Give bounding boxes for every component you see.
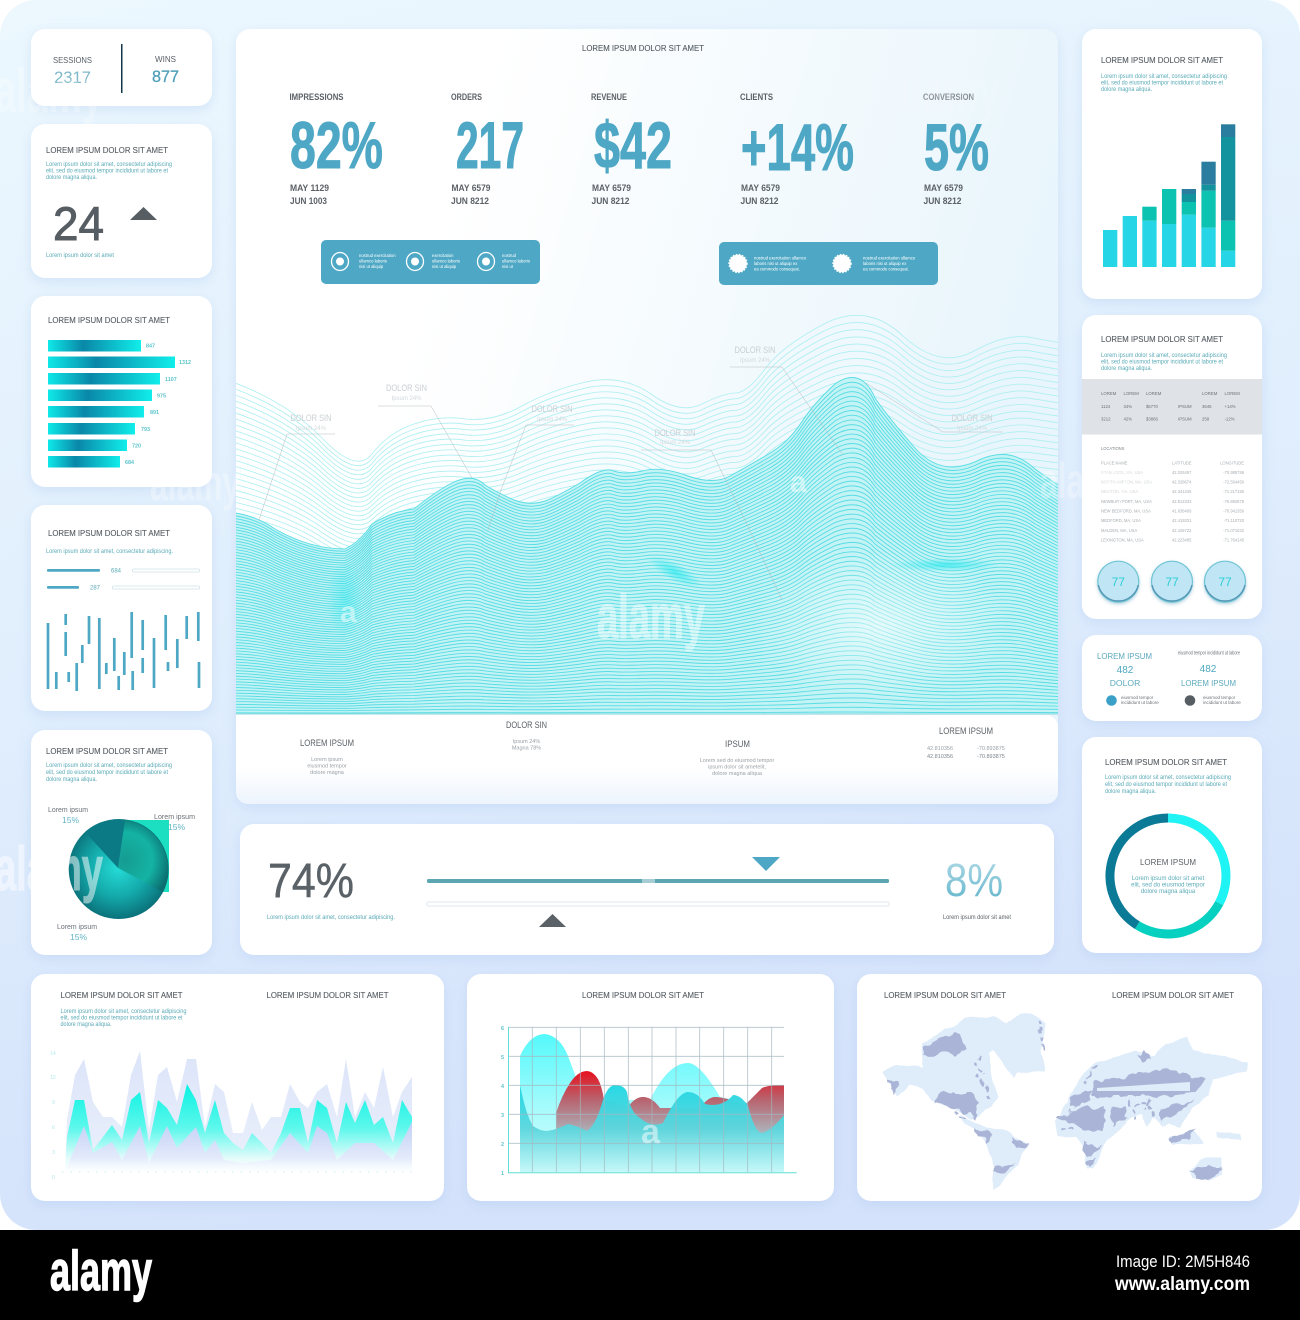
KPI: orders: ORDERS: [451, 92, 482, 102]
KPI: impressions: [290, 92, 383, 206]
score circles: [1098, 561, 1246, 602]
KPI: impressions: MAY 1129: [290, 183, 329, 193]
card: spiky area chart: 3: [52, 1150, 55, 1156]
KPI: conversion: [923, 92, 989, 206]
locations table: LONGITUDE: [1220, 460, 1244, 466]
locations table: 42.328674: [1172, 480, 1192, 484]
locations table: NEWTON, MA, USA: [1101, 489, 1138, 494]
card: sessions and wins: WINS: [155, 55, 176, 64]
locations table: -72.564450: [1223, 480, 1245, 484]
KPI: orders: 217: [456, 108, 524, 182]
score circles: 77: [1218, 575, 1232, 589]
card: 74% slider: Lorem ipsum dolor sit amet, consectetur adipiscing.: [267, 915, 395, 921]
KPI: clients: [740, 92, 854, 206]
card: small stats: incididunt ut labore: [1203, 700, 1241, 705]
callout labels: Ipsum 24%: [296, 426, 327, 432]
gray summary band: 3646: [1202, 404, 1212, 409]
card: horizontal bars: 847: [146, 344, 155, 350]
card: data table: dolore magna aliqua.: [1101, 366, 1152, 372]
legend pill left: ullamco laboris: [432, 258, 460, 264]
main panel footer: LOREM IPSUM: [300, 738, 354, 748]
locations table: 42.026497: [1172, 470, 1192, 475]
card: spiky area chart: LOREM IPSUM DOLOR SIT AMET: [60, 990, 183, 1000]
card: horizontal bars: 793: [141, 427, 150, 433]
card: stacked bar chart: elit, sed do eiusmod tempor incididunt ut labore et: [1101, 80, 1223, 86]
card: sessions and wins: 877: [152, 67, 179, 86]
callout labels: Ipsum 24%: [660, 440, 691, 446]
callout labels: DOLOR SIN: [386, 383, 427, 393]
locations table: PLACE NAME: [1101, 460, 1128, 466]
card: spiky area chart: 6: [52, 1125, 55, 1131]
gray summary band: LOREM: [1146, 391, 1162, 396]
card: pie chart: 15%: [70, 932, 87, 942]
locations table: [1101, 446, 1245, 542]
KPI: revenue: MAY 6579: [592, 183, 631, 193]
locations table: LEXINGTON, MA, USA: [1101, 538, 1144, 542]
card: data table: Lorem ipsum dolor sit amet, consectetur adipiscing: [1101, 353, 1227, 359]
main panel footer: [236, 715, 1058, 804]
card: horizontal bars: 891: [150, 410, 159, 416]
card: world map: LOREM IPSUM DOLOR SIT AMET: [884, 990, 1007, 1000]
main panel footer: eiusmod tempor: [307, 764, 347, 770]
wave terrain chart: [235, 315, 1062, 714]
locations table: MEDFORD, MA, USA: [1101, 518, 1141, 523]
watermarks: alamy: [890, 57, 1000, 126]
watermarks: a: [340, 596, 357, 629]
gray summary band: 258: [1202, 416, 1210, 422]
legend pill left: nisi ut: [502, 264, 514, 269]
watermarks: a: [641, 1113, 661, 1151]
locations table: NEW BEDFORD, MA, USA: [1101, 508, 1151, 514]
locations table: 42.425722: [1172, 528, 1192, 533]
watermarks: alamy: [150, 455, 240, 511]
card: small stats: incididunt ut labore: [1121, 700, 1159, 705]
watermarks: alamy: [597, 583, 705, 652]
card: small stats: LOREM IPSUM: [1097, 651, 1152, 661]
card: world map: [857, 974, 1262, 1201]
card: spiky area chart: elit, sed do eiusmod tempor incididunt ut labore et: [60, 1016, 183, 1022]
legend pill left: nisi ut aliquip: [432, 264, 457, 269]
card: layered area chart: 2: [501, 1142, 504, 1148]
main panel footer: 42.810356: [927, 746, 953, 752]
card: 24 stat: dolore magna aliqua.: [46, 175, 97, 181]
card: 74% slider: Lorem ipsum dolor sit amet: [943, 915, 1011, 921]
card: layered area chart: 1: [501, 1171, 504, 1177]
card: 24 stat: 24: [53, 197, 104, 250]
card: spiky area chart: 9: [52, 1100, 55, 1106]
card: donut chart: [1082, 737, 1262, 953]
card: pie chart: LOREM IPSUM DOLOR SIT AMET: [46, 746, 169, 756]
KPI: revenue: REVENUE: [591, 92, 627, 102]
card: horizontal bars: [31, 296, 212, 487]
main panel footer: -70.893875: [977, 746, 1005, 752]
map: dark regions: [888, 1020, 1223, 1180]
gray summary band: [1082, 379, 1262, 434]
card: data table: [1082, 315, 1262, 619]
card: pie chart: Lorem ipsum dolor sit amet, consectetur adipiscing: [46, 763, 172, 769]
legend pill left: ullamco laboris: [359, 258, 387, 264]
card: donut chart: dolore magna aliqua.: [1105, 789, 1156, 795]
card: 74% slider: 8%: [945, 854, 1003, 906]
card: small stats: LOREM IPSUM: [1181, 678, 1236, 688]
main panel footer: ipsum dolor sit ametelit,: [708, 764, 766, 770]
card: stacked bar chart: dolore magna aliqua.: [1101, 87, 1152, 93]
KPI: clients: CLIENTS: [740, 92, 773, 102]
KPI: impressions: IMPRESSIONS: [290, 92, 344, 102]
gray summary band: LOREM: [1224, 391, 1240, 396]
gray summary band: 34%: [1124, 404, 1132, 409]
card: donut chart: LOREM IPSUM DOLOR SIT AMET: [1105, 757, 1228, 767]
locations table: 42.419331: [1172, 518, 1192, 523]
card: small stats: eiusmod tempor incididunt ut labore: [1178, 650, 1240, 656]
card: pie chart: elit, sed do eiusmod tempor incididunt ut labore et: [46, 770, 168, 776]
card: horizontal bars: LOREM IPSUM DOLOR SIT AMET: [48, 315, 171, 325]
card: 74% slider: 74%: [268, 855, 354, 908]
legend pill left: ullamco laboris: [502, 258, 530, 264]
locations table: 42.341345: [1172, 489, 1192, 494]
watermarks: [0, 57, 1130, 1151]
score circles: 77: [1112, 575, 1125, 589]
card: pie chart: dolore magna aliqua.: [46, 777, 97, 783]
KPI: conversion: CONVERSION: [923, 92, 974, 102]
KPI: clients: MAY 6579: [741, 183, 780, 193]
card: spiky area chart: dolore magna aliqua.: [60, 1022, 112, 1028]
callout labels: DOLOR SIN: [532, 404, 572, 414]
locations table: NEWBURYPORT, MA, USA: [1101, 499, 1152, 504]
card: world map: LOREM IPSUM DOLOR SIT AMET: [1112, 990, 1235, 1000]
locations table: 42.223485: [1172, 538, 1192, 542]
card: sessions and wins: SESSIONS: [53, 56, 92, 65]
watermarks: a: [790, 466, 807, 499]
gray summary band: LOREM: [1124, 391, 1139, 396]
KPI: orders: MAY 6579: [452, 183, 490, 193]
card: donut chart: elit, sed do eiusmod tempor: [1131, 882, 1205, 888]
card: progress and tick chart: LOREM IPSUM DOLOR SIT AMET: [48, 528, 171, 538]
KPI: impressions: 82%: [290, 108, 383, 182]
card: horizontal bars: 684: [125, 460, 134, 466]
gray summary band: $3866: [1146, 416, 1159, 422]
callout labels: Ipsum 24%: [391, 396, 422, 402]
callout labels: DOLOR SIN: [952, 413, 992, 423]
legend pill right: ea commodo consequat.: [863, 266, 909, 272]
card: 24 stat: [31, 124, 212, 278]
card: pie chart: Lorem ipsum: [48, 807, 88, 814]
card: pie chart: Lorem ipsum: [154, 814, 195, 821]
card: sessions and wins: 2317: [54, 68, 91, 87]
locations table: -71.110720: [1224, 518, 1245, 523]
main panel footer: dolore magna aliqua: [712, 771, 763, 777]
KPI: orders: [451, 92, 524, 206]
callout labels: [259, 345, 1003, 600]
gray summary band: 1124: [1101, 404, 1111, 409]
locations table: 41.638409: [1172, 508, 1192, 514]
card: 24 stat: LOREM IPSUM DOLOR SIT AMET: [46, 145, 169, 155]
card: layered area chart: 6: [501, 1026, 504, 1032]
main panel: [235, 29, 1062, 804]
main panel footer: Lorem ipsum: [311, 757, 343, 763]
main panel footer: 42.810356: [927, 754, 953, 760]
KPI: revenue: JUN 8212: [592, 196, 630, 206]
main panel footer: IPSUM: [725, 739, 750, 749]
legend pill right: nostrud exercitation ullamco: [863, 256, 916, 260]
card: horizontal bars: 1312: [179, 360, 191, 366]
card: small stats: eiusmod tempor: [1203, 695, 1236, 700]
card: horizontal bars: 975: [157, 394, 166, 400]
KPI: clients: JUN 8212: [740, 196, 778, 206]
card: 74% slider: [240, 824, 1054, 955]
main panel footer: Lorem sed do eiusmod tempor: [700, 758, 774, 764]
card: horizontal bars: 720: [132, 444, 141, 450]
gray summary band: 3212: [1101, 416, 1111, 422]
locations table: STAN LOCK, MA, USA: [1101, 470, 1143, 475]
KPI: impressions: JUN 1003: [290, 196, 327, 206]
callout labels: DOLOR SIN: [734, 345, 776, 355]
score circles: 77: [1165, 575, 1179, 589]
card: spiky area chart: 14: [50, 1051, 56, 1057]
locations table: -70.985786: [1223, 470, 1245, 475]
watermarks: alamy: [0, 835, 103, 904]
locations table: NORTHAMPTON, MA, USA: [1101, 480, 1152, 484]
main panel footer: Magna 78%: [512, 746, 541, 752]
gray summary band: IPSUM: [1178, 416, 1192, 422]
gray summary band: $6770: [1146, 404, 1159, 409]
locations table: -70.941356: [1223, 508, 1245, 514]
card: progress and tick chart: [31, 505, 212, 711]
gray summary band: -12%: [1224, 416, 1235, 422]
card: spiky area chart: 12: [50, 1075, 56, 1081]
callout labels: DOLOR SIN: [290, 413, 332, 423]
card: progress and tick chart: 684: [111, 568, 122, 574]
legend pill right: nostrud exercitation ullamco: [754, 256, 807, 260]
main panel title: LOREM IPSUM DOLOR SIT AMET: [582, 43, 705, 53]
legend pill right: laboris nisi ut aliquip ex: [754, 261, 798, 266]
website: www.alamy.com: [1114, 1274, 1250, 1295]
card: 24 stat: elit, sed do eiusmod tempor incididunt ut labore et: [46, 168, 168, 174]
main panel footer: Ipsum 24%: [513, 739, 540, 745]
card: layered area chart: LOREM IPSUM DOLOR SIT AMET: [582, 990, 705, 1000]
card: small stats: DOLOR: [1110, 678, 1140, 688]
legend pill left: nostrud: [502, 253, 517, 258]
locations table: LATITUDE: [1172, 460, 1192, 466]
card: donut chart: LOREM IPSUM: [1140, 858, 1196, 867]
card: pie chart: 15%: [62, 815, 79, 825]
legend pill left: [321, 240, 540, 284]
KPI: revenue: [591, 92, 672, 206]
image id: Image ID: 2M5H846: [1116, 1252, 1250, 1271]
card: layered area chart: [467, 974, 834, 1201]
card: data table: LOREM IPSUM DOLOR SIT AMET: [1101, 334, 1224, 344]
KPI: conversion: JUN 8212: [924, 196, 962, 206]
card: data table: elit, sed do eiusmod tempor incididunt ut labore et: [1101, 360, 1223, 366]
KPI: conversion: 5%: [924, 110, 989, 184]
legend pill left: nostrud exercitation: [359, 253, 396, 258]
watermarks: alamy: [0, 57, 103, 126]
card: progress and tick chart: 287: [90, 586, 101, 592]
alamy logo: alamy: [50, 1239, 152, 1302]
main panel footer: LOREM IPSUM: [939, 726, 993, 736]
card: 24 stat: Lorem ipsum dolor sit amet, consectetur adipiscing: [46, 162, 172, 168]
KPI: orders: JUN 8212: [451, 196, 489, 206]
card: pie chart: [31, 730, 212, 955]
map: land: [883, 1013, 1248, 1190]
callout labels: Ipsum 24%: [957, 426, 988, 432]
card: donut chart: Lorem ipsum dolor sit amet, consectetur adipiscing: [1105, 775, 1231, 781]
card: layered area chart: 5: [501, 1055, 504, 1061]
card: horizontal bars: 1107: [165, 377, 177, 383]
main panel footer: DOLOR SIN: [506, 720, 547, 730]
legend pill left: nisi ut aliquip: [359, 264, 384, 269]
card: pie chart: 15%: [168, 822, 185, 832]
locations table: -71.764145: [1223, 538, 1245, 542]
footer black band: [0, 1230, 1300, 1320]
callout labels: DOLOR SIN: [654, 428, 696, 438]
legend pill right: ea commodo consequat.: [754, 266, 800, 272]
card: spiky area chart: 0: [52, 1175, 55, 1181]
card: donut chart: Lorem ipsum dolor sit amet: [1132, 876, 1205, 882]
gray summary band: +14%: [1224, 404, 1236, 409]
locations table: -71.217150: [1223, 489, 1245, 494]
KPI: clients: +14%: [741, 110, 854, 184]
callout labels: Ipsum 24%: [740, 358, 771, 364]
legend pill right: [719, 242, 938, 285]
watermarks: alamy: [1040, 453, 1130, 509]
main panel footer: -70.893875: [977, 754, 1005, 760]
gray summary band: IPSUM: [1178, 404, 1192, 409]
card: sessions and wins: [31, 29, 212, 106]
legend pill left: exercitation: [432, 253, 454, 258]
card: stacked bar chart: Lorem ipsum dolor sit amet, consectetur adipiscing: [1101, 74, 1227, 80]
card: layered area chart: 4: [501, 1084, 504, 1090]
KPI: conversion: MAY 6579: [924, 183, 963, 193]
card: spiky area chart: [31, 974, 444, 1201]
card: spiky area chart: Lorem ipsum dolor sit amet, consectetur adipiscing: [60, 1009, 186, 1015]
card: 24 stat: Lorem ipsum dolor sit amet: [46, 253, 114, 259]
locations table: LOCATIONS: [1101, 446, 1125, 451]
gray summary band: 42%: [1124, 416, 1132, 422]
locations table: 42.812333: [1172, 499, 1192, 504]
card: pie chart: Lorem ipsum: [57, 924, 97, 931]
card: donut chart: elit, sed do eiusmod tempor incididunt ut labore et: [1105, 782, 1227, 788]
gray summary band: LOREM: [1101, 391, 1117, 396]
card: donut chart: dolore magna aliqua: [1141, 889, 1196, 895]
card: layered area chart: 3: [501, 1113, 504, 1119]
card: stacked bar chart: LOREM IPSUM DOLOR SIT AMET: [1101, 55, 1224, 65]
card: small stats: eiusmod tempor: [1121, 695, 1154, 700]
card: small stats: 482: [1117, 665, 1134, 676]
card: small stats: 482: [1200, 664, 1217, 675]
callout labels: Ipsum 24%: [537, 417, 568, 423]
card: small stats: [1082, 635, 1262, 721]
KPI: revenue: $42: [594, 108, 672, 182]
locations table: -71.071022: [1223, 528, 1245, 533]
legend pill right: laboris nisi ut aliquip ex: [863, 261, 907, 266]
gray summary band: LOREM: [1202, 391, 1218, 396]
main panel footer: dolore magna: [310, 770, 345, 776]
locations table: MALDEN, MA, USA: [1101, 528, 1137, 533]
card: stacked bar chart: [1082, 29, 1262, 299]
card: spiky area chart: LOREM IPSUM DOLOR SIT AMET: [266, 990, 389, 1000]
card: progress and tick chart: Lorem ipsum dolor sit amet, consectetur adipiscing.: [46, 549, 173, 555]
locations table: -70.892875: [1223, 499, 1245, 504]
